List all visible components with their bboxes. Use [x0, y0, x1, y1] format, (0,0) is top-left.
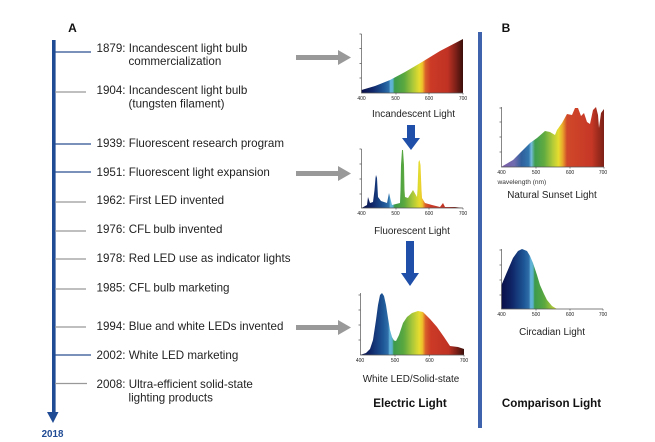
arrow: fluorescent to LED — [401, 241, 419, 286]
arrow: 1879 to incandescent — [296, 50, 351, 65]
timeline entries: 1879: Incandescent light bulb — [96, 42, 247, 55]
heading: electric light: Electric Light — [373, 397, 447, 410]
chart: incandescent spectrum: 500 — [391, 96, 400, 102]
vertical divider — [478, 32, 482, 428]
chart: natural sunset spectrum: 700 — [599, 170, 607, 176]
chart: LED spectrum: 700 — [460, 358, 468, 364]
timeline entries: 1985: CFL bulb marketing — [96, 282, 229, 294]
chart: natural sunset spectrum: 400 — [497, 170, 506, 176]
timeline entries: 1994: Blue and white LEDs invented — [96, 320, 283, 333]
chart: incandescent spectrum: 400 — [357, 96, 366, 102]
heading: comparison light: Comparison Light — [502, 397, 601, 410]
chart: LED spectrum — [356, 293, 468, 364]
timeline entries: 1976: CFL bulb invented — [96, 223, 222, 236]
chart: fluorescent spectrum: 600 — [425, 211, 433, 217]
chart: fluorescent spectrum: 700 — [459, 211, 467, 217]
chart: incandescent spectrum: 600 — [425, 96, 433, 102]
label A: A — [68, 21, 77, 35]
arrow: incandescent to fluorescent — [402, 125, 420, 150]
timeline — [42, 40, 291, 440]
timeline entries — [96, 42, 291, 404]
chart: circadian spectrum: 500 — [532, 312, 540, 318]
timeline ticks — [55, 52, 91, 384]
timeline entries: (tungsten filament) — [128, 98, 225, 110]
caption: circadian: Circadian Light — [519, 327, 585, 338]
timeline end year: 2018 — [42, 429, 64, 440]
chart: fluorescent spectrum: 400 — [357, 211, 366, 217]
timeline entries: 1951: Fluorescent light expansion — [96, 166, 270, 179]
chart: fluorescent spectrum: 500 — [391, 211, 400, 217]
caption: sunset: Natural Sunset Light — [507, 190, 597, 201]
timeline entries: 1962: First LED invented — [96, 194, 224, 207]
chart: LED spectrum: 500 — [391, 358, 399, 364]
chart: circadian spectrum — [497, 249, 607, 318]
chart: circadian spectrum: 400 — [497, 312, 506, 318]
chart: incandescent spectrum — [357, 34, 467, 102]
caption: incandescent: Incandescent Light — [372, 109, 455, 120]
timeline entries: 2002: White LED marketing — [96, 349, 238, 362]
label B: B — [502, 21, 511, 35]
timeline entries: commercialization — [128, 55, 221, 68]
chart: fluorescent spectrum — [357, 149, 467, 217]
caption: fluorescent: Fluorescent Light — [374, 226, 450, 237]
timeline entries: 1904: Incandescent light bulb — [96, 84, 247, 97]
timeline entries: 2008: Ultra-efficient solid-state — [96, 378, 253, 391]
timeline entries: lighting products — [128, 392, 213, 404]
chart: circadian spectrum: 700 — [599, 312, 607, 318]
timeline entries: 1939: Fluorescent research program — [96, 137, 284, 150]
chart: natural sunset spectrum: 500 — [532, 170, 540, 176]
arrow: 1994 to LED — [296, 320, 351, 335]
chart: natural sunset spectrum: 600 — [566, 170, 574, 176]
chart: LED spectrum: 400 — [356, 358, 364, 364]
chart: natural sunset spectrum — [496, 107, 607, 186]
axis title: wavelength (nm) — [496, 179, 546, 186]
chart: incandescent spectrum: 700 — [459, 96, 467, 102]
chart: LED spectrum: 600 — [425, 358, 434, 364]
timeline axis arrow — [47, 40, 58, 423]
arrow: 1951 to fluorescent — [296, 166, 351, 181]
caption: LED: White LED/Solid-state — [363, 374, 460, 385]
chart: circadian spectrum: 600 — [566, 312, 574, 318]
timeline entries: 1978: Red LED use as indicator lights — [96, 252, 291, 265]
